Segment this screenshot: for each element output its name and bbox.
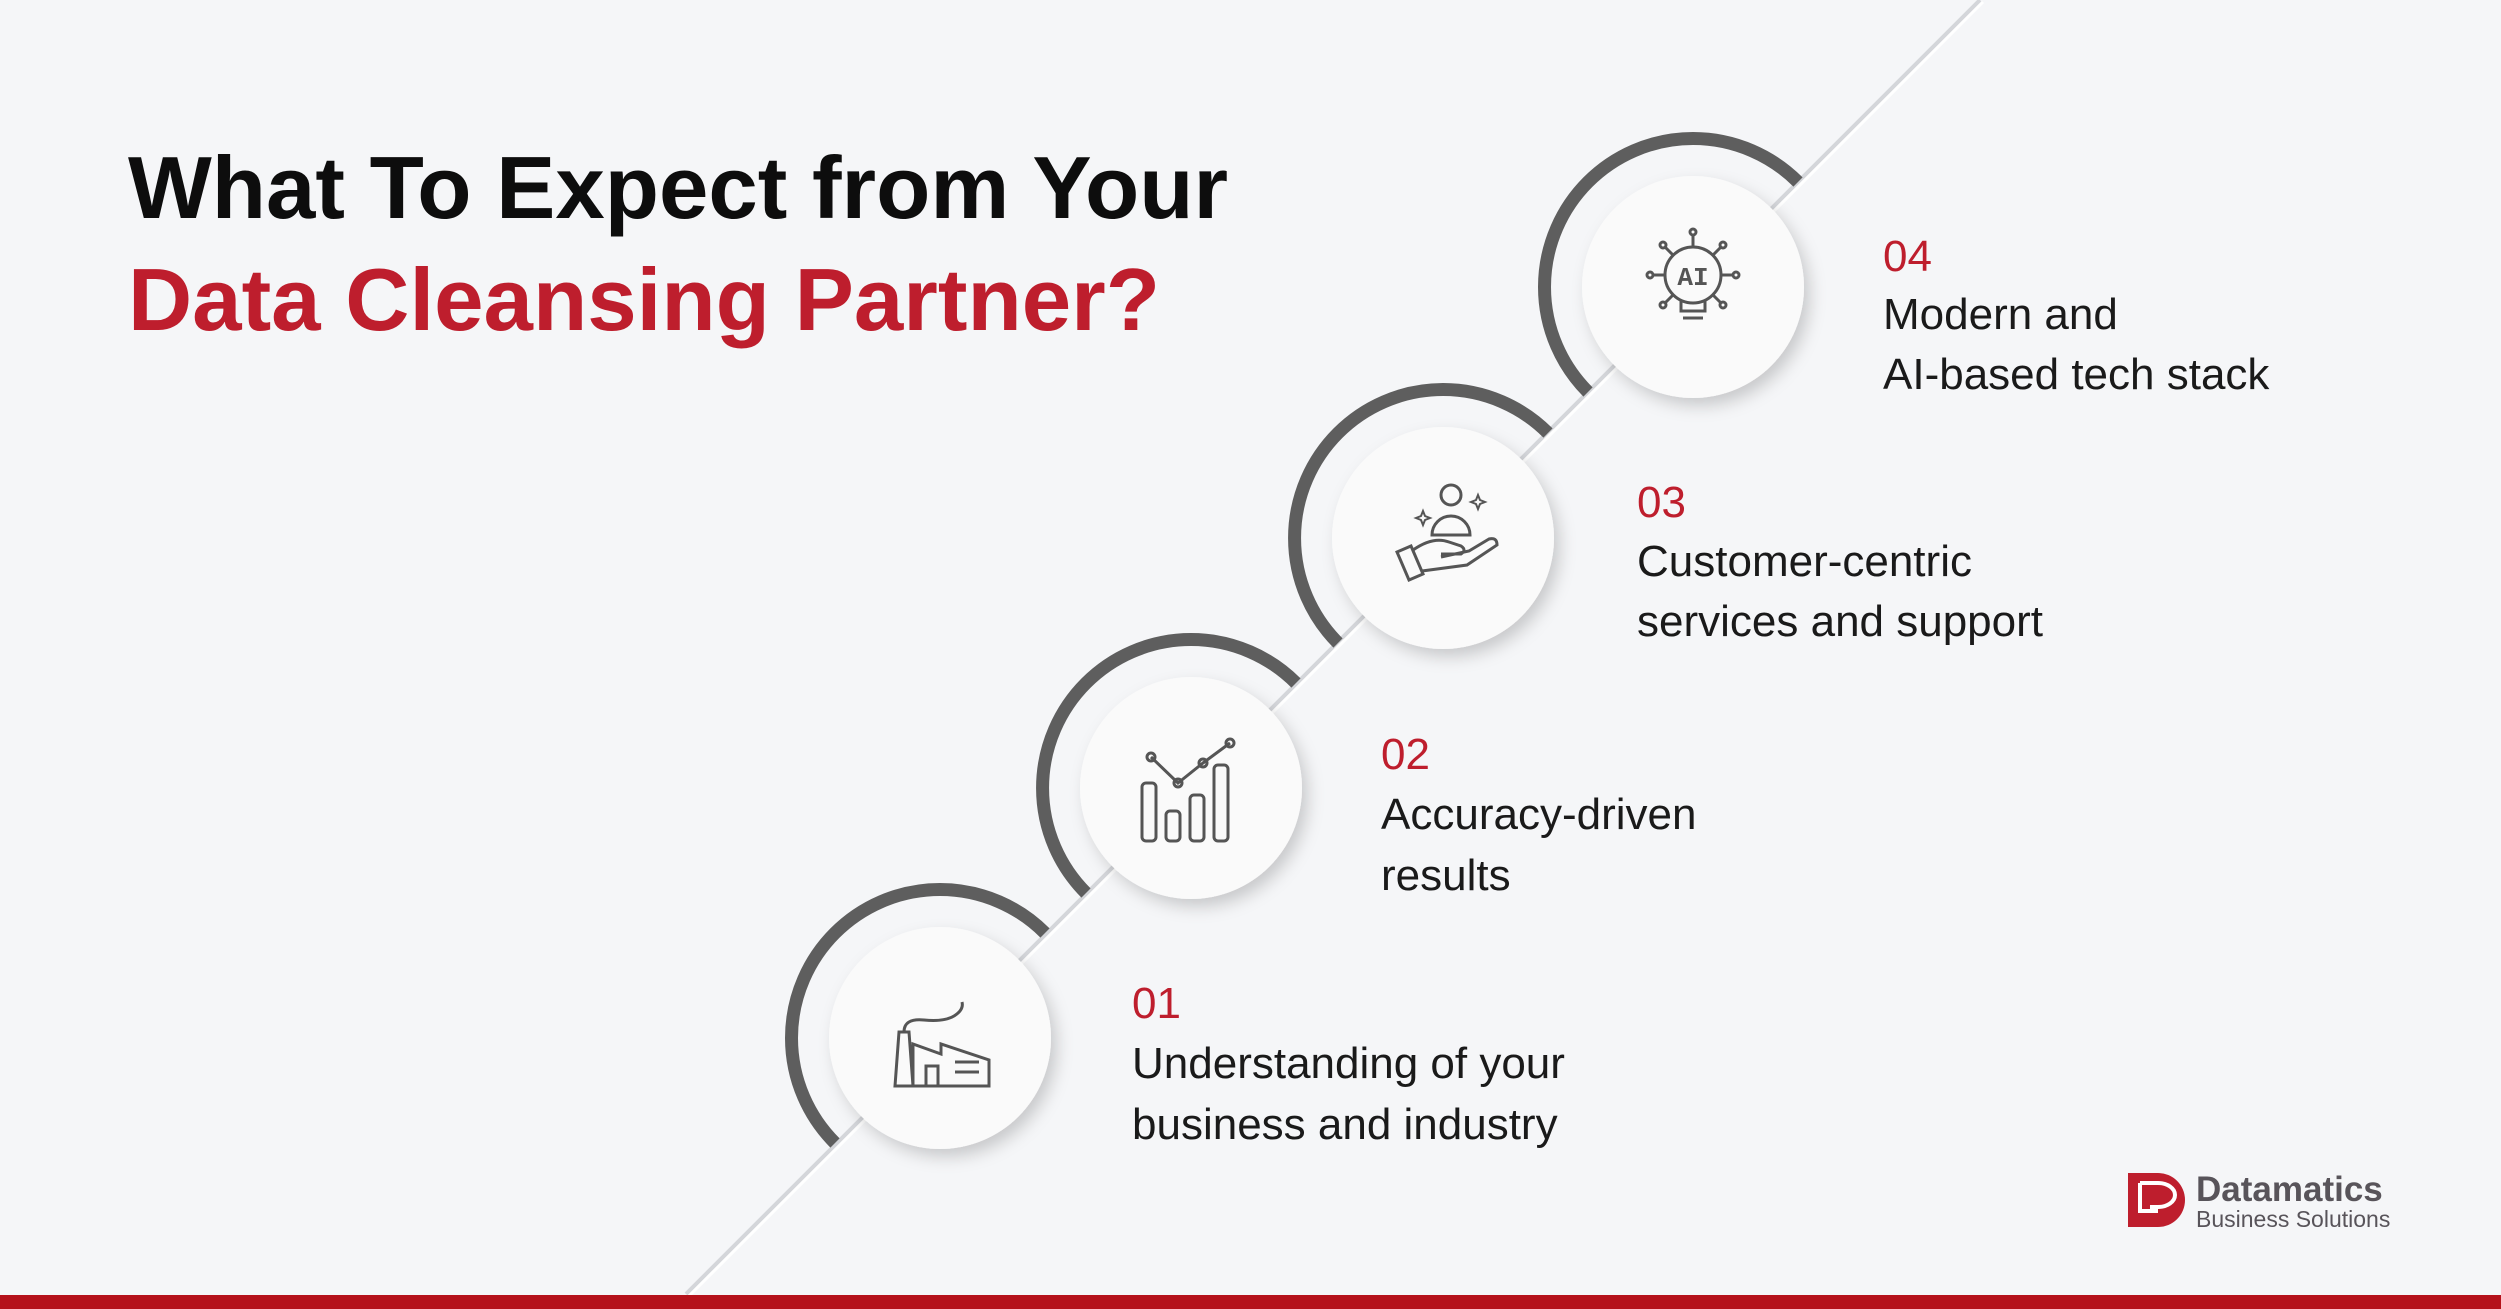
text 03: Customer-centric bbox=[1637, 537, 1972, 586]
step 02 bbox=[1043, 640, 1302, 899]
step 01 bbox=[792, 890, 1051, 1149]
icon: hand with person bbox=[1397, 485, 1497, 580]
icon: factory bbox=[895, 1002, 989, 1086]
text 01: Understanding of your bbox=[1132, 1039, 1565, 1088]
text 03: services and support bbox=[1637, 597, 2043, 646]
logo: Datamatics bbox=[2196, 1170, 2383, 1209]
title bbox=[128, 138, 1228, 349]
logo bbox=[2128, 1170, 2390, 1232]
text 04: AI-based tech stack bbox=[1883, 350, 2270, 399]
text 01: business and industry bbox=[1132, 1100, 1558, 1149]
text 02: Accuracy-driven bbox=[1381, 790, 1696, 839]
icon: AI bulb bbox=[1647, 229, 1739, 318]
text 04: Modern and bbox=[1883, 290, 2118, 339]
text 02: results bbox=[1381, 851, 1511, 900]
text 01: 01 bbox=[1132, 979, 1181, 1028]
text 01 bbox=[1132, 979, 1565, 1149]
title: Data Cleansing Partner? bbox=[128, 250, 1160, 349]
title: What To Expect from Your bbox=[128, 138, 1228, 237]
text 02 bbox=[1381, 730, 1696, 900]
icon: bar chart bbox=[1142, 739, 1234, 841]
bottom bar bbox=[0, 1295, 2501, 1309]
text 03 bbox=[1637, 478, 2043, 646]
step 04 bbox=[1545, 139, 1804, 398]
text 02: 02 bbox=[1381, 730, 1430, 779]
step 03 bbox=[1295, 390, 1554, 649]
text 03: 03 bbox=[1637, 478, 1686, 527]
icon: AI bulb: AI bbox=[1677, 263, 1709, 293]
logo: Business Solutions bbox=[2196, 1206, 2390, 1232]
diagonal line bbox=[686, 0, 1983, 1296]
text 04 bbox=[1883, 232, 2270, 399]
text 04: 04 bbox=[1883, 232, 1932, 281]
